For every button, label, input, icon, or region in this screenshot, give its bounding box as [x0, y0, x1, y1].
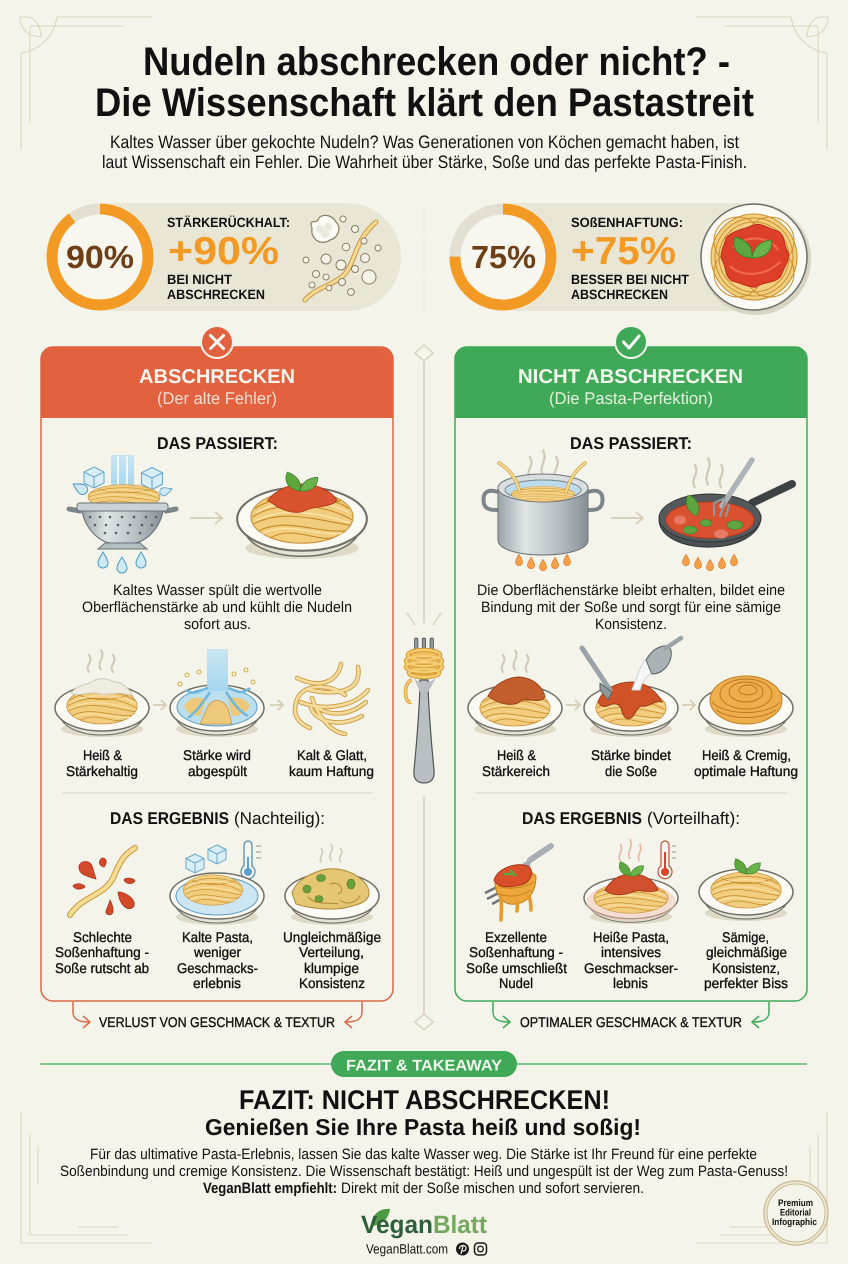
labels: results: Verteilung,: [299, 944, 364, 960]
labels: results: erlebnis: [193, 975, 241, 991]
badge: premium editorial infographic: Editorial: [780, 1208, 811, 1218]
labels: results: intensives: [601, 944, 661, 960]
callout: verlust: [73, 1002, 362, 1030]
fazit banner: FAZIT & TAKEAWAY: [346, 1058, 503, 1074]
badge: premium editorial infographic: Premium: [778, 1198, 813, 1209]
donut 90%: 90%: [66, 239, 134, 275]
icon: plate with sauce: [237, 472, 367, 559]
subtitle: Kaltes Wasser über gekochte Nudeln? Was Generationen von Köchen gemacht haben, ist: [110, 132, 739, 152]
heading: das ergebnis: DAS ERGEBNIS: [522, 809, 642, 828]
labels: results: Ungleichmäßige: [283, 929, 381, 945]
fazit banner: [40, 1051, 807, 1077]
labels: steps: die Soße: [605, 763, 657, 779]
icon: pan with sauce: [659, 458, 792, 571]
stat text: BEI NICHT: [167, 272, 233, 287]
fazit text: Direkt mit der Soße mischen und sofort servieren.: [341, 1180, 644, 1197]
labels: steps: Heiß & Cremig,: [702, 747, 791, 763]
title: Die Wissenschaft klärt den Pastastreit: [95, 81, 754, 125]
icon: colander with cold water: [69, 455, 176, 573]
labels: results: Exzellente: [485, 929, 547, 945]
heading: das ergebnis: [110, 809, 325, 828]
stat: starch retention: [46, 203, 401, 311]
fazit text: VeganBlatt empfiehlt:: [203, 1180, 337, 1197]
logo: VeganBlatt: [361, 1209, 488, 1239]
labels: results: Soßenhaftung -: [469, 944, 563, 960]
labels: results: klumpige: [304, 960, 359, 976]
arrow: [270, 700, 283, 710]
labels: results: Geschmackser-: [584, 960, 678, 976]
labels: results: Schlechte: [73, 929, 132, 945]
labels: results: Soßenhaftung -: [55, 944, 149, 960]
panel header: [455, 347, 807, 418]
heading: das passiert: DAS PASSIERT:: [570, 434, 692, 453]
badge: premium editorial infographic: Infographic: [772, 1217, 817, 1228]
labels: results: perfekter Biss: [704, 975, 788, 991]
callout: verlust: VERLUST VON GESCHMACK & TEXTUR: [99, 1014, 335, 1030]
icon: loose noodles: [295, 664, 368, 734]
labels: results: Konsistenz: [299, 975, 365, 991]
icon: creamy pasta mound: [699, 676, 793, 737]
labels: steps: Stärkereich: [482, 763, 550, 779]
logo: VeganBlatt: Vegan: [361, 1211, 433, 1239]
panel header: (Die Pasta-Perfektion): [549, 389, 713, 408]
labels: steps: Stärke bindet: [591, 747, 671, 763]
stat text: SOßENHAFTUNG:: [571, 215, 683, 230]
website and social icons: VeganBlatt.com: [366, 1242, 448, 1256]
labels: results: Soße umschließt: [466, 960, 567, 976]
icon: creamy plate: [699, 859, 793, 921]
labels: results: gleichmäßige: [706, 944, 787, 960]
arrow: [611, 512, 643, 524]
callout: optimal: [493, 1002, 769, 1030]
fazit heading: [205, 1085, 641, 1140]
labels: results: Soße rutscht ab: [55, 960, 149, 976]
heading: das ergebnis: [522, 809, 740, 828]
arrow: [566, 700, 580, 710]
panel header: [41, 347, 393, 418]
fazit text: Soßenbindung und cremige Konsistenz. Die Wissenschaft bestätigt: Heiß und ungespült ist der Weg zum Pasta-Genuss!: [60, 1163, 788, 1180]
heading: das ergebnis: (Vorteilhaft):: [647, 809, 740, 828]
labels: steps: kaum Haftung: [289, 763, 374, 779]
icon: pinterest: [456, 1242, 469, 1256]
icon: cold pasta: [170, 841, 264, 925]
labels: results: Nudel: [499, 975, 533, 991]
fazit heading: Genießen Sie Ihre Pasta heiß und soßig!: [205, 1114, 641, 1140]
labels: results: [466, 929, 788, 991]
icon: pot of boiling pasta: [484, 450, 602, 571]
donut 90%: [46, 203, 154, 311]
text: description: [82, 582, 352, 633]
text: description: [477, 582, 785, 633]
labels: results: Konsistenz,: [712, 960, 780, 976]
labels: steps: [482, 747, 798, 779]
labels: steps: Kalt & Glatt,: [297, 747, 367, 763]
icon: clumpy pasta: [285, 844, 379, 925]
stat text: BESSER BEI NICHT: [571, 272, 690, 287]
icon: starch washed off: [170, 649, 264, 737]
heading: das passiert: DAS PASSIERT:: [157, 434, 278, 453]
text: description: Oberflächenstärke ab und kühlt die Nudeln: [82, 599, 352, 616]
donut 75%: 75%: [471, 239, 536, 275]
title: [95, 40, 754, 125]
arrow: [153, 700, 166, 710]
stat: sauce adhesion: [449, 203, 811, 315]
title: Nudeln abschrecken oder nicht? -: [143, 40, 730, 84]
labels: steps: Heiß &: [497, 747, 537, 763]
heading: das ergebnis: (Nachteilig):: [234, 809, 325, 828]
labels: results: weniger: [193, 944, 241, 960]
icon: sauce slips off noodle: [70, 848, 135, 915]
subtitle: laut Wissenschaft ein Fehler. Die Wahrheit über Stärke, Soße und das perfekte Pasta-Finish.: [102, 152, 747, 172]
panel: abschrecken: [41, 325, 393, 1001]
icon: x badge: [200, 325, 234, 359]
arrow: [682, 700, 695, 710]
icon: check badge: [614, 325, 648, 359]
icon: instagram: [474, 1243, 486, 1255]
text: description: Die Oberflächenstärke bleibt erhalten, bildet eine: [477, 582, 785, 599]
heading: das ergebnis: DAS ERGEBNIS: [110, 809, 229, 828]
icon: hot pasta: [584, 839, 678, 924]
stat text: +90%: [168, 230, 279, 273]
text: description: Bindung mit der Soße und sorgt für eine sämige: [481, 599, 781, 616]
labels: results: Sämige,: [722, 929, 769, 945]
divider: center fork: [406, 345, 442, 1030]
fazit text: Für das ultimative Pasta-Erlebnis, lassen Sie das kalte Wasser weg. Die Stärke ist Ihr Freund für eine perfekte: [90, 1146, 757, 1163]
icon: plate of pasta: [701, 204, 811, 315]
stat text: ABSCHRECKEN: [571, 287, 668, 302]
labels: results: Heiße Pasta,: [593, 929, 669, 945]
fazit heading: FAZIT: NICHT ABSCHRECKEN!: [239, 1085, 610, 1115]
icon: fork with pasta: [406, 638, 442, 783]
fazit text: [60, 1146, 788, 1197]
logo: VeganBlatt: Blatt: [433, 1211, 488, 1239]
donut 75%: [449, 203, 557, 311]
text: description: sofort aus.: [184, 616, 251, 633]
labels: steps: Heiß &: [83, 747, 123, 763]
labels: steps: abgespült: [188, 763, 247, 779]
labels: results: Geschmacks-: [177, 960, 258, 976]
arrow: [190, 512, 222, 524]
icon: hot plate with sauce: [468, 650, 562, 737]
text: description: Konsistenz.: [595, 616, 667, 633]
text: description: Kaltes Wasser spült die wertvolle: [113, 582, 322, 599]
stat text: ABSCHRECKEN: [167, 287, 265, 302]
icon: hot starchy plate: [55, 650, 149, 737]
panel header: ABSCHRECKEN: [139, 366, 295, 388]
icon: starch binds sauce: [582, 638, 681, 737]
labels: results: Kalte Pasta,: [182, 929, 253, 945]
labels: steps: Stärke wird: [183, 747, 251, 763]
labels: results: lebnis: [613, 975, 648, 991]
callout: optimal: OPTIMALER GESCHMACK & TEXTUR: [520, 1014, 742, 1030]
stat text: STÄRKERÜCKHALT:: [167, 215, 290, 230]
labels: steps: optimale Haftung: [694, 763, 798, 779]
icon: starch bubbles and noodle: [303, 215, 381, 300]
icon: leaf: [373, 1209, 390, 1226]
panel header: (Der alte Fehler): [157, 389, 277, 408]
panel: nicht abschrecken: [455, 325, 807, 1001]
subtitle: [102, 132, 747, 172]
stat text: [571, 215, 690, 302]
labels: steps: Stärkehaltig: [66, 763, 138, 779]
panel header: NICHT ABSCHRECKEN: [518, 366, 743, 388]
icon: fork wrapped in saucy pasta: [485, 846, 551, 920]
badge: premium editorial infographic: [764, 1181, 828, 1245]
stat text: +75%: [571, 230, 676, 273]
labels: results: [55, 929, 381, 991]
stat text: [167, 215, 290, 302]
labels: steps: [66, 747, 374, 779]
